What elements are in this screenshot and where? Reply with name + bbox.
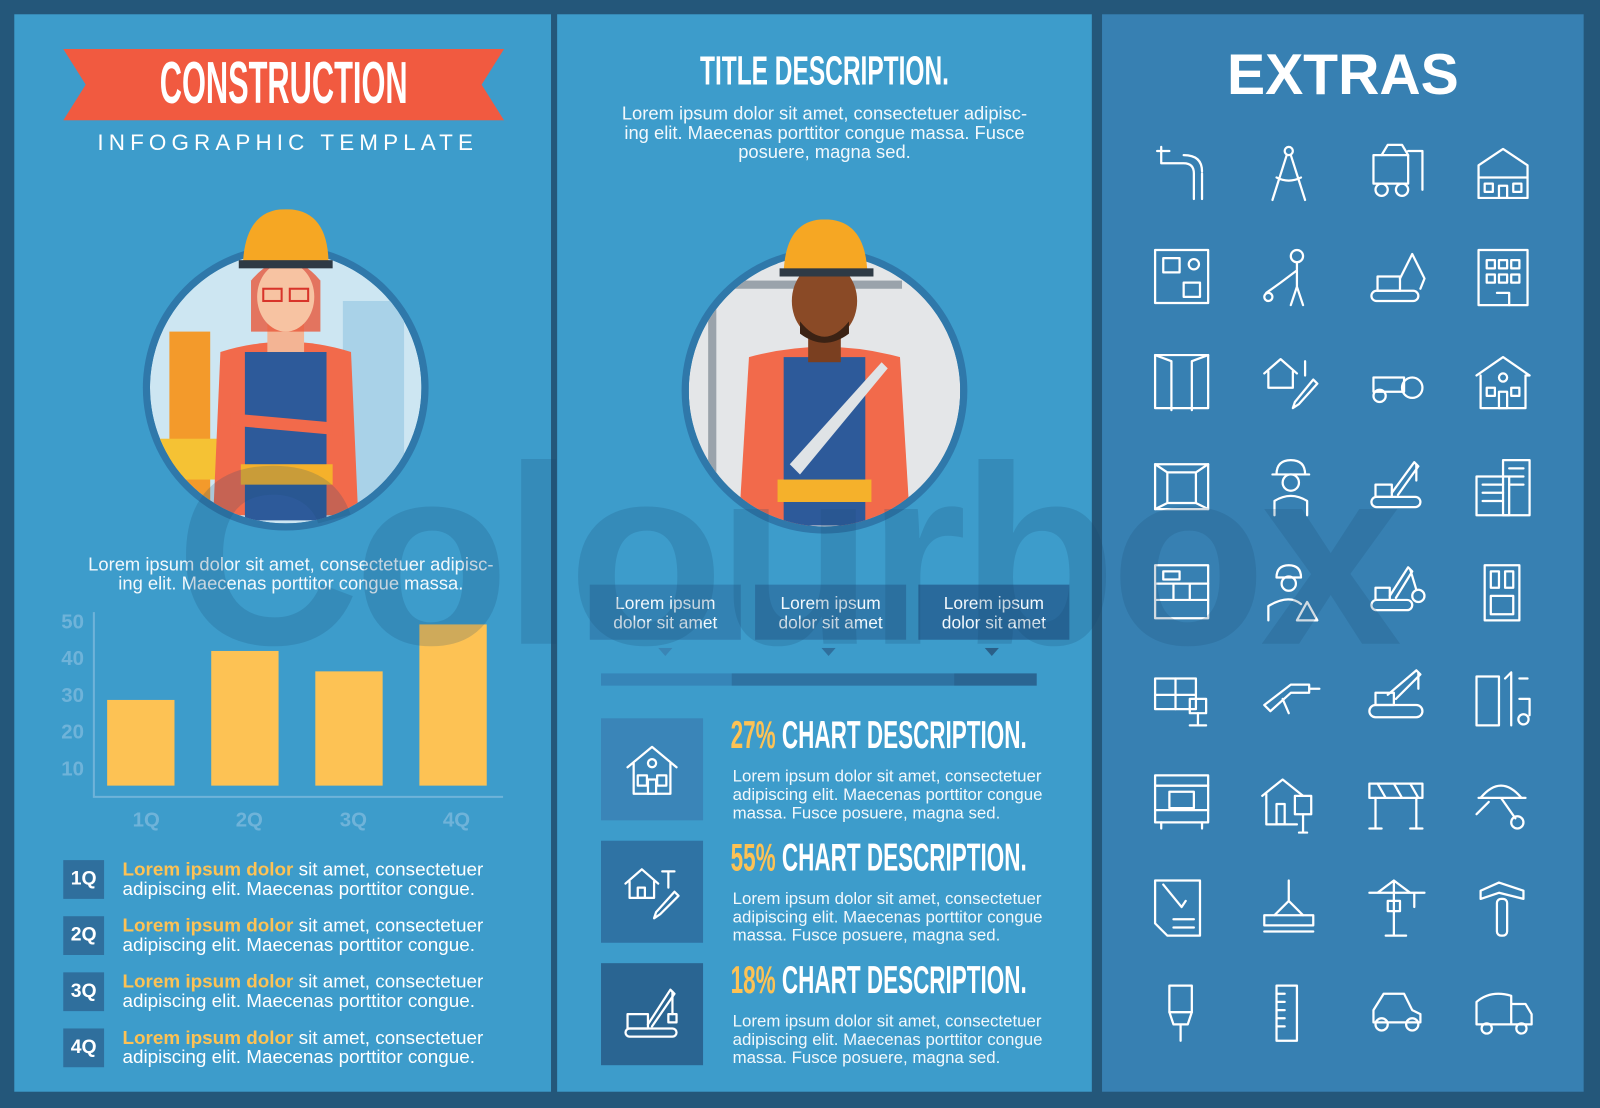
panel: middle <box>557 14 1092 1092</box>
text: middle description: Lorem ipsum dolor sit amet, consectetuer adipisc- <box>622 103 1027 123</box>
illustration: female worker <box>142 209 428 530</box>
list: quarters: Lorem ipsum dolor sit amet, consectetuer <box>122 1026 483 1048</box>
list: quarters <box>63 858 483 1068</box>
chart item 18%: 18% CHART DESCRIPTION. <box>731 959 1027 1002</box>
panel: left <box>14 14 551 1092</box>
panel: extras <box>1102 14 1584 1092</box>
chart item 18% <box>601 959 1042 1067</box>
list: quarters: adipiscing elit. Maecenas porttitor congue. <box>122 990 475 1011</box>
bar chart: 1Q <box>133 809 160 831</box>
list: quarters: 1Q <box>71 868 97 890</box>
timeline labels: Lorem ipsum <box>944 594 1044 613</box>
title: CONSTRUCTION <box>160 50 408 116</box>
list: quarters: adipiscing elit. Maecenas porttitor congue. <box>122 934 475 955</box>
bar chart: 40 <box>61 648 84 670</box>
bar chart: 30 <box>61 685 84 707</box>
text: middle description: posuere, magna sed. <box>738 142 911 162</box>
list: quarters: Lorem ipsum dolor sit amet, consectetuer <box>122 914 483 936</box>
subtitle: INFOGRAPHIC TEMPLATE <box>97 130 478 155</box>
bar chart <box>61 612 503 831</box>
timeline labels: dolor sit amet <box>613 613 717 633</box>
list: quarters: 3Q <box>71 981 97 1002</box>
list: quarters: adipiscing elit. Maecenas porttitor congue. <box>122 1046 475 1067</box>
text: middle description: ing elit. Maecenas porttitor congue massa. Fusce <box>624 122 1025 143</box>
text: left description: ing elit. Maecenas porttitor congue massa. <box>118 573 463 594</box>
timeline labels: dolor sit amet <box>942 613 1046 633</box>
text: left description <box>88 554 493 594</box>
list: quarters: Lorem ipsum dolor sit amet, consectetuer <box>122 970 483 992</box>
bar chart: 10 <box>61 758 84 780</box>
list: quarters: Lorem ipsum dolor sit amet, consectetuer <box>122 858 483 879</box>
chart item 27% <box>601 714 1042 822</box>
chart item 55%: 55% CHART DESCRIPTION. <box>731 837 1027 879</box>
chart item 55%: Lorem ipsum dolor sit amet, consectetuer adipiscing elit. Maecenas porttitor congue massa. Fusce posuere, magna sed. <box>733 890 1042 945</box>
list: quarters: 4Q <box>71 1037 97 1058</box>
bar chart: 20 <box>61 722 84 744</box>
chart item 55% <box>601 837 1042 945</box>
bar chart: 4Q <box>443 809 470 831</box>
chart item 27%: Lorem ipsum dolor sit amet, consectetuer adipiscing elit. Maecenas porttitor congue massa. Fusce posuere, magna sed. <box>733 767 1042 822</box>
list: quarters: adipiscing elit. Maecenas porttitor congue. <box>122 877 475 899</box>
heading: extras: EXTRAS <box>1227 42 1459 106</box>
watermark: Colourbox <box>176 413 1396 698</box>
heading: title description: TITLE DESCRIPTION. <box>700 49 949 94</box>
timeline labels <box>590 584 1070 656</box>
title ribbon <box>63 49 504 120</box>
list: quarters: 2Q <box>71 924 97 946</box>
bar chart: 50 <box>61 612 84 634</box>
text: left description: Lorem ipsum dolor sit amet, consectetuer adipisc- <box>88 554 493 574</box>
timeline bar <box>601 673 1037 686</box>
timeline labels: Lorem ipsum <box>780 594 881 613</box>
illustration: male worker <box>682 220 968 534</box>
timeline labels: Lorem ipsum <box>615 594 715 613</box>
text: middle description <box>622 103 1027 162</box>
chart item 18%: Lorem ipsum dolor sit amet, consectetuer adipiscing elit. Maecenas porttitor congue massa. Fusce posuere, magna sed. <box>733 1012 1042 1067</box>
bar chart: 2Q <box>236 809 263 831</box>
bar chart: 3Q <box>340 809 367 831</box>
icon grid <box>1154 144 1533 1042</box>
chart item 27%: 27% CHART DESCRIPTION. <box>731 714 1027 757</box>
timeline labels: dolor sit amet <box>779 613 883 633</box>
